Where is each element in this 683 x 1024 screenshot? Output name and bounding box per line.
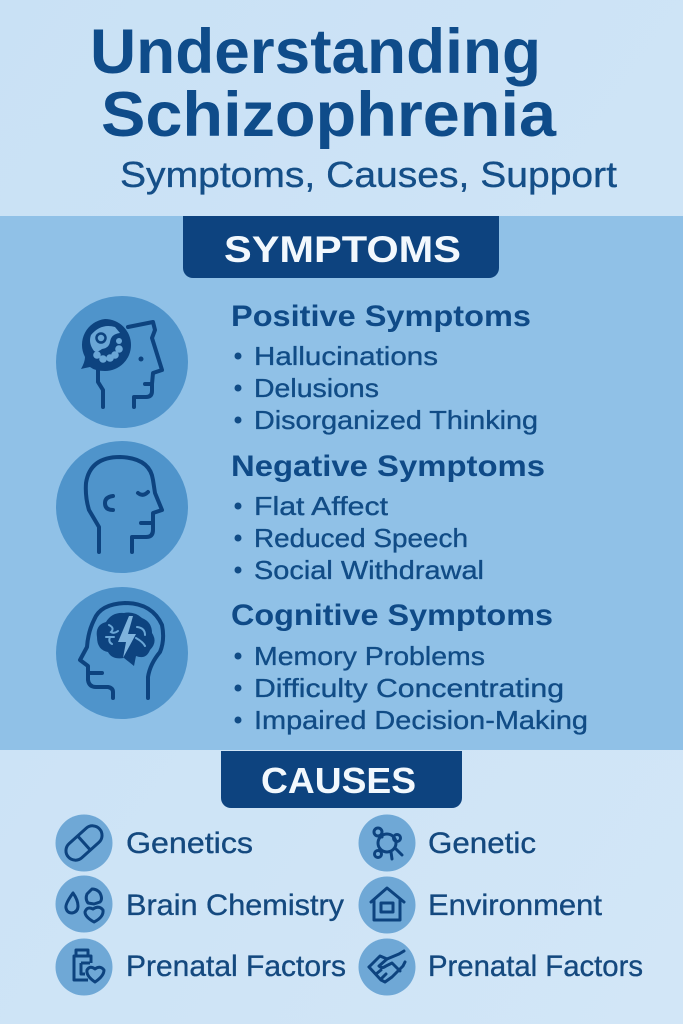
panel: symptoms — [0, 216, 683, 750]
item: prenatal factors left: Prenatal Factors — [126, 950, 346, 983]
title: Schizophrenia — [101, 80, 557, 150]
text: positive symptoms — [231, 300, 538, 435]
item: brain chemistry: Brain Chemistry — [126, 889, 344, 922]
icon: capsule — [56, 814, 112, 872]
item: prenatal factors right: Prenatal Factors — [428, 950, 643, 983]
icon: molecule — [358, 814, 416, 872]
text: negative symptoms: Flat Affect — [254, 491, 389, 521]
title — [90, 17, 557, 150]
text: positive symptoms: Delusions — [254, 373, 379, 403]
text: positive symptoms: Disorganized Thinking — [254, 405, 538, 435]
icon: head with closed eye — [56, 441, 188, 573]
icon: drops and heart — [56, 876, 112, 932]
item: genetics: Genetics — [126, 827, 253, 860]
icon: head with brain — [56, 587, 188, 719]
text: cognitive symptoms: Difficulty Concentrating — [254, 673, 564, 703]
text: cognitive symptoms — [231, 599, 588, 735]
subtitle: Symptoms, Causes, Support — [120, 154, 617, 195]
text: cognitive symptoms: Cognitive Symptoms — [231, 599, 553, 632]
heading: causes: CAUSES — [261, 760, 416, 801]
text: positive symptoms: Positive Symptoms — [231, 300, 531, 333]
heading: symptoms — [183, 216, 499, 278]
panel: causes — [56, 751, 643, 996]
icon: house — [358, 876, 416, 934]
text: negative symptoms: Social Withdrawal — [254, 555, 484, 585]
title: Understanding — [90, 17, 541, 87]
heading: symptoms: SYMPTOMS — [224, 229, 461, 270]
text: cognitive symptoms: Impaired Decision-Making — [254, 705, 588, 735]
item: environment: Environment — [428, 889, 603, 922]
text: cognitive symptoms: Memory Problems — [254, 641, 485, 671]
text: negative symptoms: Reduced Speech — [254, 523, 468, 553]
icon: bottle and heart — [56, 938, 112, 996]
text: positive symptoms: Hallucinations — [254, 341, 438, 371]
icon: head with thought bubble — [56, 296, 188, 428]
text: negative symptoms: Negative Symptoms — [231, 450, 545, 483]
heading: causes — [221, 751, 462, 808]
text: negative symptoms — [231, 450, 545, 585]
item: genetic: Genetic — [428, 827, 536, 860]
icon: handshake — [358, 938, 416, 996]
